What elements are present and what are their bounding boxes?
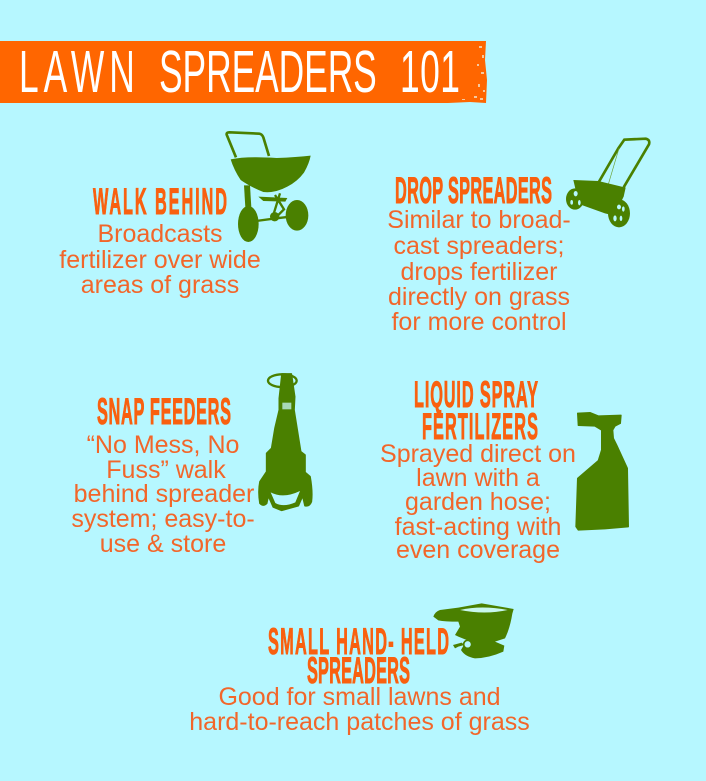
text: drop spreaders description xyxy=(387,206,571,336)
text: snap feeders description: behind spreader xyxy=(74,480,254,508)
text: snap feeders description: “No Mess, No xyxy=(87,431,239,459)
text: liquid spray description: even coverage xyxy=(396,536,560,564)
heading: small hand-held spreaders: SMALL HAND- HELD xyxy=(268,622,449,663)
text: liquid spray description: lawn with a xyxy=(416,464,540,492)
text: liquid spray description xyxy=(380,440,576,564)
text: walk behind description xyxy=(59,220,261,299)
text: liquid spray description: Sprayed direct on xyxy=(380,440,576,468)
section: walk behind xyxy=(59,182,261,299)
title: SPREADERS xyxy=(159,40,377,105)
heading: drop spreaders: DROP SPREADERS xyxy=(395,171,552,212)
title: 101 xyxy=(400,40,460,105)
text: liquid spray description: garden hose; xyxy=(405,488,551,516)
text: walk behind description: Broadcasts xyxy=(97,220,223,248)
heading: liquid spray fertilizers xyxy=(414,375,538,448)
text: snap feeders description: Fuss” walk xyxy=(106,456,226,484)
heading: liquid spray fertilizers: FERTILIZERS xyxy=(422,407,538,448)
text: drop spreaders description: drops fertilizer xyxy=(400,258,558,286)
section: drop spreaders xyxy=(387,171,571,336)
icon: walk behind spreader xyxy=(227,132,311,242)
heading: small hand-held spreaders: SPREADERS xyxy=(307,651,410,692)
text: snap feeders description xyxy=(71,431,255,558)
text: walk behind description: areas of grass xyxy=(81,271,239,299)
text: hand-held description xyxy=(189,683,530,736)
text: drop spreaders description: directly on grass xyxy=(388,283,570,311)
text: hand-held description: Good for small lawns and xyxy=(218,683,501,711)
text: drop spreaders description: Similar to broad- xyxy=(387,206,571,234)
heading: liquid spray fertilizers: LIQUID SPRAY xyxy=(414,375,538,416)
text: drop spreaders description: for more control xyxy=(391,308,567,336)
heading: snap feeders: SNAP FEEDERS xyxy=(97,392,231,433)
heading: small hand-held spreaders xyxy=(268,622,449,692)
icon: hand-held spreader xyxy=(433,603,514,658)
text: walk behind description: fertilizer over wide xyxy=(59,246,261,274)
icon: spray bottle xyxy=(576,413,628,530)
icon: drop spreader xyxy=(566,139,649,227)
text: snap feeders description: use & store xyxy=(100,530,226,558)
text: snap feeders description: system; easy-to- xyxy=(71,505,255,533)
title banner xyxy=(0,40,487,105)
title xyxy=(19,40,460,105)
title: LAWN xyxy=(19,40,135,105)
text: hand-held description: hard-to-reach patches of grass xyxy=(189,708,530,736)
icon: snap feeder xyxy=(259,374,312,510)
section: snap feeders xyxy=(71,392,255,558)
section: small hand-held spreaders xyxy=(189,622,530,736)
text: drop spreaders description: cast spreaders; xyxy=(394,232,564,260)
section: liquid spray fertilizers xyxy=(380,375,576,564)
text: liquid spray description: fast-acting with xyxy=(395,513,561,541)
heading: walk behind: WALK BEHIND xyxy=(93,182,227,223)
